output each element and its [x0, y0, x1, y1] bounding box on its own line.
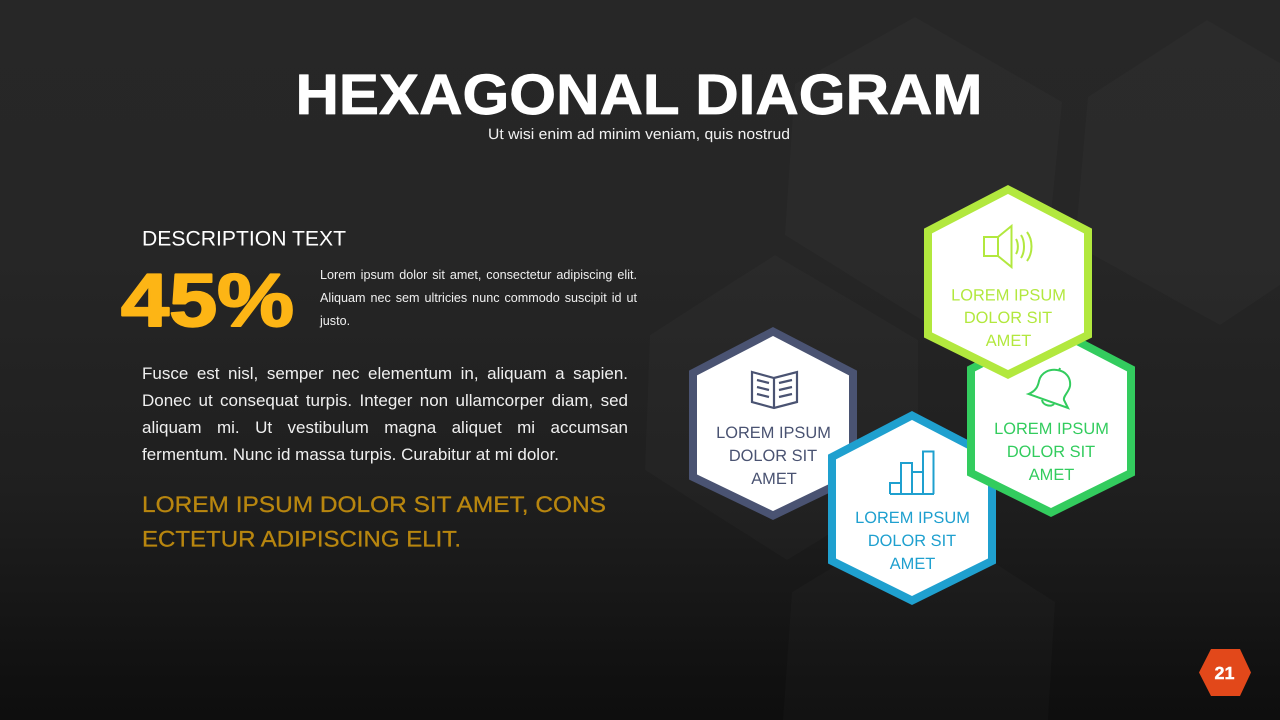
text block: body paragraph: aliquam mi. Ut vestibulum magna aliquet mi accumsan — [142, 418, 628, 437]
text block: stat description: Lorem ipsum dolor sit amet, consectetur adipiscing elit. — [320, 268, 637, 282]
hexagon: blue chart — [832, 416, 992, 600]
page number badge: 21 — [1214, 663, 1235, 683]
subtitle: Ut wisi enim ad minim veniam, quis nostrud — [488, 126, 790, 143]
hexagon: slate book: DOLOR SIT — [729, 447, 817, 465]
icon: speaker — [984, 226, 1032, 267]
callout: gold text — [142, 492, 606, 552]
text block: body paragraph: Fusce est nisl, semper nec elementum in, aliquam a sapien. — [142, 364, 628, 383]
text block: stat description: Aliquam nec sem ultricies nunc commodo suscipit id ut — [320, 291, 637, 305]
hexagon: lime speaker: AMET — [986, 332, 1031, 350]
icon: open book — [752, 372, 797, 408]
hexagon: green bell: LOREM IPSUM — [994, 420, 1109, 438]
text block: body paragraph — [142, 364, 628, 464]
heading: description text: DESCRIPTION TEXT — [142, 228, 346, 250]
callout: gold text: LOREM IPSUM DOLOR SIT AMET, CONS — [142, 492, 606, 517]
hexagon: green bell — [971, 328, 1131, 512]
hexagon: slate book: LOREM IPSUM — [716, 424, 831, 442]
hexagon: lime speaker: DOLOR SIT — [964, 309, 1052, 327]
hexagon: blue chart: AMET — [890, 555, 935, 573]
icon: bell — [1028, 368, 1070, 408]
hexagon: slate book — [693, 332, 853, 516]
icon: bar chart — [890, 452, 934, 494]
hexagon: slate book: AMET — [751, 470, 797, 488]
hexagon: green bell: AMET — [1029, 466, 1074, 484]
text block: stat description: justo. — [320, 314, 350, 328]
hexagon: blue chart: DOLOR SIT — [868, 532, 956, 550]
text block: body paragraph: Donec ut consequat turpis. Integer non ullamcorper diam, sed — [142, 391, 628, 410]
callout: gold text: ECTETUR ADIPISCING ELIT. — [142, 526, 461, 552]
title: HEXAGONAL DIAGRAM — [296, 63, 982, 127]
hexagon: blue chart: LOREM IPSUM — [855, 509, 970, 527]
hexagon: lime speaker — [928, 190, 1088, 374]
text block: body paragraph: fermentum. Nunc id massa turpis. Curabitur at mi dolor. — [142, 445, 559, 464]
text block: stat description — [320, 268, 637, 328]
hexagon: green bell: DOLOR SIT — [1007, 443, 1095, 461]
hexagon: lime speaker: LOREM IPSUM — [951, 286, 1066, 304]
big stat: 45%: 45% — [121, 258, 294, 340]
